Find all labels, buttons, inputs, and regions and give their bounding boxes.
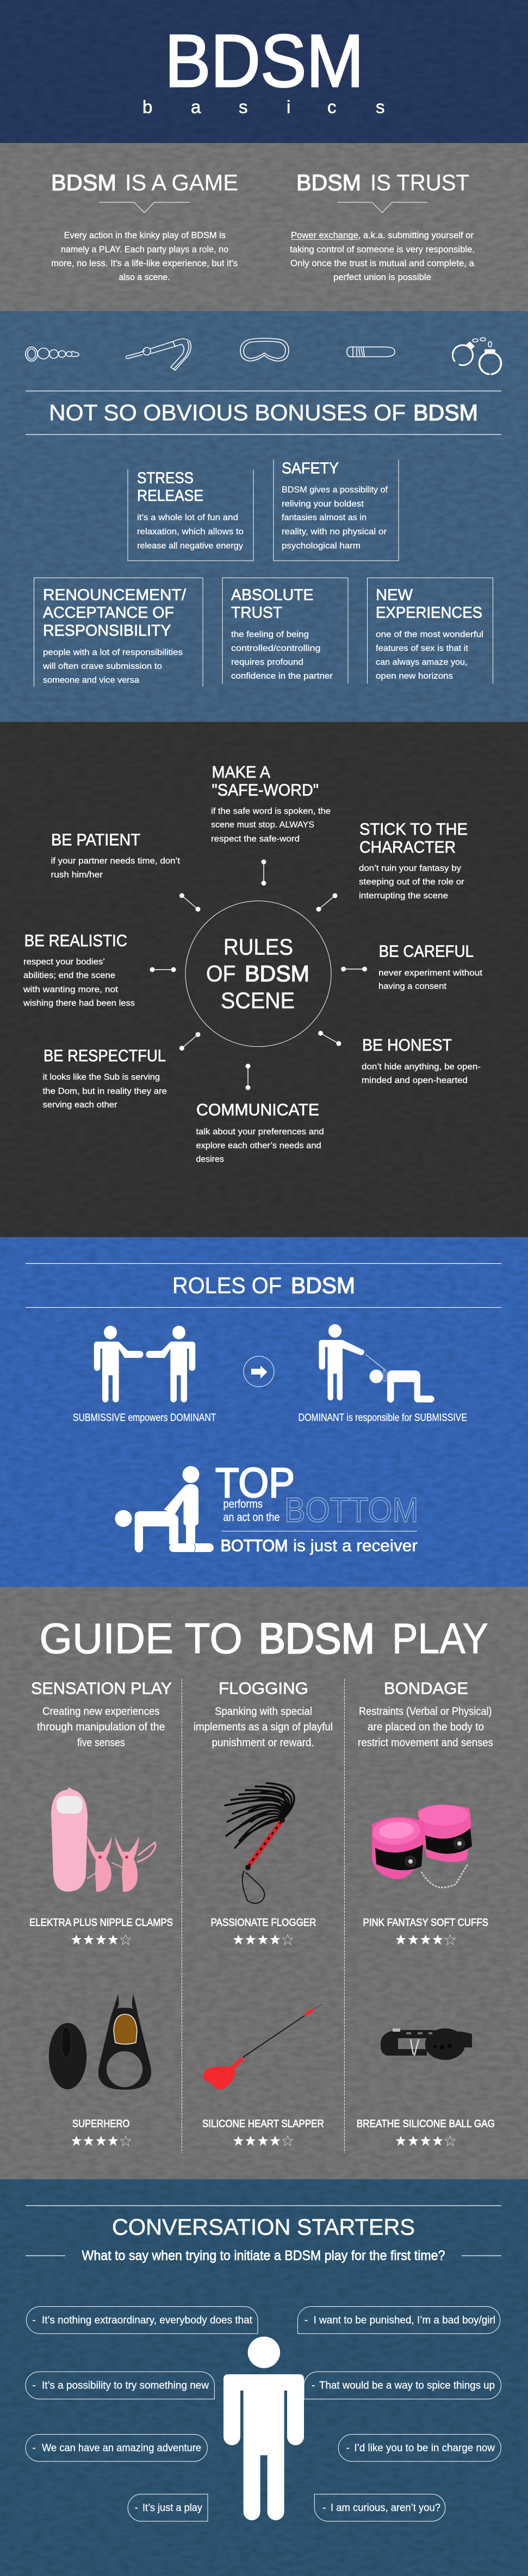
rule: make a safe-word: "SAFE-WORD" xyxy=(212,780,319,799)
bubble: spice things up: - xyxy=(312,2380,315,2391)
heading: roles of BDSM: ROLES OF xyxy=(172,1273,282,1298)
card: stress release xyxy=(128,469,253,561)
card: renouncement: RENOUNCEMENT/ xyxy=(43,586,187,604)
rule: communicate xyxy=(196,1100,324,1164)
product: superhero xyxy=(49,1994,151,2090)
heading: guide to BDSM play: PLAY xyxy=(392,1614,488,1662)
heading: roles of BDSM xyxy=(172,1273,355,1298)
card: renouncement: someone and vice versa xyxy=(43,675,139,685)
rule: communicate: desires xyxy=(196,1155,224,1164)
text: top performs an act on the bottom xyxy=(215,1460,419,1555)
icon: arrow in circle xyxy=(244,1356,274,1387)
rule: be respectful: it looks like the Sub is serving xyxy=(43,1073,160,1082)
bubble: curious: - xyxy=(322,2503,326,2513)
card: safety: fantasies almost as in xyxy=(282,513,367,522)
column text: bondage: Restraints (Verbal or Physical) xyxy=(359,1705,492,1717)
card: stress release: it’s a whole lot of fun and xyxy=(137,513,238,522)
panel: game and trust xyxy=(51,170,475,282)
center circle with title xyxy=(185,901,331,1047)
rule: stick to the character: steeping out of the role or xyxy=(359,878,464,887)
label: breathe silicone ball gag: BREATHE SILICONE BALL GAG xyxy=(357,2119,495,2130)
heading: BDSM is a game: IS A GAME xyxy=(125,170,238,195)
card: new experiences: open new horizons xyxy=(376,672,453,681)
text: game description: namely a PLAY. Each party plays a role, no xyxy=(61,244,228,255)
rule: be honest: BE HONEST xyxy=(362,1035,452,1054)
text: game description: Every action in the kinky play of BDSM is xyxy=(64,230,226,240)
text: trust description: taking control of someone is very responsible. xyxy=(290,244,475,255)
icon: handcuffs xyxy=(452,338,501,374)
column text: bondage: are placed on the body to xyxy=(368,1721,484,1733)
text: top performs an act on the bottom: TOP xyxy=(215,1460,295,1506)
label: silicone heart slapper: SILICONE HEART SLAPPER xyxy=(202,2119,324,2130)
rule: make a safe-word: if the safe word is spoken, the xyxy=(211,807,331,816)
panel: conversation starters xyxy=(26,2206,501,2521)
heading: BDSM is trust: BDSM xyxy=(296,170,361,195)
rule: be patient: if your partner needs time, don’t xyxy=(51,856,181,866)
icon: top and bottom figures xyxy=(115,1466,214,1553)
product: elektra plus nipple clamps xyxy=(51,1787,156,1892)
text: trust description: Only once the trust is mutual and complete, a xyxy=(290,258,475,269)
product: silicone heart slapper xyxy=(203,2004,322,2089)
column text: sensation play: SENSATION PLAY xyxy=(31,1679,172,1698)
heading: guide to BDSM play xyxy=(39,1614,488,1662)
text: trust description xyxy=(290,230,475,282)
rule: stick to the character: don’t ruin your fantasy by xyxy=(359,864,461,873)
column text: flogging: implements as a sign of playful xyxy=(194,1721,333,1733)
heading: not so obvious bonuses: NOT SO OBVIOUS BONUSES OF xyxy=(49,400,406,425)
text: top performs an act on the bottom: BOTTOM xyxy=(221,1536,288,1555)
product: pink fantasy soft cuffs xyxy=(371,1805,472,1888)
card: renouncement: will often crave submission to xyxy=(42,662,162,671)
label: passionate flogger: PASSIONATE FLOGGER xyxy=(211,1917,316,1929)
column text: flogging: FLOGGING xyxy=(219,1679,308,1698)
text: top performs an act on the bottom: performs xyxy=(223,1498,263,1511)
rating stars row 2 xyxy=(71,2136,456,2146)
card: new experiences: features of sex is that it xyxy=(376,644,469,653)
center circle with title: OF xyxy=(206,961,236,986)
card: safety: SAFETY xyxy=(282,460,339,477)
label: elektra plus nipple clamps: ELEKTRA PLUS NIPPLE CLAMPS xyxy=(29,1917,173,1929)
panel: bonuses of BDSM xyxy=(26,338,501,687)
card: absolute trust xyxy=(222,578,348,684)
product: breathe silicone ball gag xyxy=(381,2028,472,2060)
text: trust description: perfect union is possible xyxy=(333,272,431,282)
rule: stick to the character: STICK TO THE xyxy=(359,820,468,839)
card: absolute trust: ABSOLUTE xyxy=(231,586,313,604)
rule: be patient: BE PATIENT xyxy=(51,830,140,849)
rule: be patient: rush him/her xyxy=(51,870,103,879)
rule: make a safe-word: respect the safe-word xyxy=(211,834,300,843)
rule: be respectful: serving each other xyxy=(43,1101,117,1110)
bubble: want to be punished xyxy=(297,2307,500,2333)
rule: communicate: COMMUNICATE xyxy=(196,1100,319,1119)
rule: be respectful: BE RESPECTFUL xyxy=(44,1046,166,1065)
card: safety: psychological harm xyxy=(282,541,361,550)
text: top performs an act on the bottom: BOTTOM xyxy=(284,1491,419,1530)
column text: bondage: BONDAGE xyxy=(384,1679,468,1698)
rating stars row 1 xyxy=(71,1935,456,1945)
text: trust description: Power exchange, a.k.a. submitting yourself or xyxy=(291,230,474,240)
caption: submissive empowers dominant: SUBMISSIVE empowers DOMINANT xyxy=(73,1412,216,1424)
center circle with title: BDSM xyxy=(245,961,309,986)
card: stress release: STRESS xyxy=(137,470,194,487)
icon: two figures handing over xyxy=(94,1326,195,1402)
bubble: possibility to try something new: It’s a possibility to try something new xyxy=(42,2380,209,2391)
card: stress release: RELEASE xyxy=(137,487,203,505)
card: new experiences: NEW xyxy=(376,586,413,604)
rule: be honest: don’t hide anything, be open- xyxy=(362,1063,481,1071)
bubble: possibility to try something new: - xyxy=(32,2380,36,2391)
subheading: what to say: What to say when trying to initiate a BDSM play for the first time? xyxy=(82,2248,445,2263)
rule: stick to the character: interrupting the scene xyxy=(359,891,448,901)
rule: be careful: never experiment without xyxy=(378,969,483,978)
icon: flogger xyxy=(126,339,191,370)
bubble: amazing adventure: - xyxy=(32,2443,36,2454)
text: game description: more, no less. It's a life-like experience, but it's xyxy=(51,258,238,269)
heading: roles of BDSM: BDSM xyxy=(291,1273,355,1298)
card: new experiences: one of the most wonderful xyxy=(376,630,483,639)
bubble: amazing adventure: We can have an amazing adventure xyxy=(42,2443,201,2454)
icon: blindfold mask xyxy=(240,338,289,361)
column text: bondage: restrict movement and senses xyxy=(358,1737,493,1749)
card: absolute trust: requires profound xyxy=(231,657,303,667)
rule: be realistic: abilities; end the scene xyxy=(23,971,115,980)
card: safety: reliving your boldest xyxy=(282,499,364,508)
center circle with title: SCENE xyxy=(221,988,295,1013)
caption: dominant is responsible: DOMINANT is responsible for SUBMISSIVE xyxy=(299,1412,467,1424)
rule: be honest xyxy=(362,1035,481,1085)
card: absolute trust: controlled/controlling xyxy=(231,644,321,653)
card: safety xyxy=(274,460,399,561)
icon: standing figure xyxy=(223,2337,304,2520)
panel: rules of BDSM scene xyxy=(23,762,483,1164)
rule: stick to the character: CHARACTER xyxy=(359,837,456,856)
bubble: in charge now: - xyxy=(346,2443,350,2454)
card: renouncement xyxy=(34,578,203,687)
bubble: want to be punished: - xyxy=(305,2314,308,2326)
column text: sensation play xyxy=(31,1679,172,1749)
rule: be realistic: respect your bodies’ xyxy=(23,957,105,967)
label: superhero: SUPERHERO xyxy=(72,2119,129,2130)
bubble: nothing extraordinary: It’s nothing extraordinary, everybody does that xyxy=(42,2314,253,2326)
column text: sensation play: five senses xyxy=(77,1737,125,1749)
subtitle: basics: basics xyxy=(142,97,385,117)
text: game description: also a scene. xyxy=(119,272,170,282)
rule: be careful: BE CAREFUL xyxy=(379,942,474,961)
rule: be patient xyxy=(51,830,181,879)
panel: guide to BDSM play xyxy=(29,1614,495,2153)
bubble: just a play: - xyxy=(135,2503,138,2513)
bubble: just a play: It’s just a play xyxy=(142,2503,202,2513)
product: passionate flogger xyxy=(225,1783,294,1903)
card: new experiences: can always amaze you, xyxy=(376,657,468,667)
bubble: just a play xyxy=(128,2494,208,2521)
heading: not so obvious bonuses: BDSM xyxy=(413,400,478,425)
rule: be careful xyxy=(378,942,483,991)
rule: communicate: explore each other’s needs and xyxy=(196,1141,321,1151)
icon: vibrator xyxy=(347,347,395,357)
heading: guide to BDSM play: BDSM xyxy=(259,1614,375,1662)
card: new experiences: EXPERIENCES xyxy=(376,604,482,622)
bubble: curious xyxy=(314,2494,445,2521)
card: stress release: relaxation, which allows to xyxy=(137,527,244,537)
card: absolute trust: confidence in the partner xyxy=(231,672,333,681)
text: top performs an act on the bottom: is just a receiver xyxy=(293,1536,418,1555)
rule: be respectful xyxy=(43,1046,167,1110)
title: BDSM: BDSM xyxy=(165,20,364,103)
rule: be realistic: BE REALISTIC xyxy=(24,931,127,950)
connector dots xyxy=(150,860,367,1090)
bubble: curious: I am curious, aren’t you? xyxy=(331,2503,440,2513)
center circle with title: RULES xyxy=(223,934,293,959)
rule: be realistic xyxy=(23,931,135,1008)
heading: BDSM is trust xyxy=(296,170,469,195)
panel: hero title xyxy=(142,20,385,117)
card: safety: reality, with no physical or xyxy=(282,527,387,537)
card: renouncement: ACCEPTANCE OF xyxy=(43,604,174,622)
rule: stick to the character xyxy=(359,820,468,901)
card: absolute trust: the feeling of being xyxy=(231,630,309,639)
card: safety: BDSM gives a possibility of xyxy=(282,486,388,495)
rule: be respectful: the Dom, but in reality they are xyxy=(43,1087,167,1096)
bubble: want to be punished: I want to be punished, I’m a bad boy/girl xyxy=(313,2314,495,2326)
column text: flogging: punishment or reward. xyxy=(212,1737,314,1749)
card: new experiences xyxy=(368,578,493,684)
card: stress release: release all negative energy xyxy=(137,541,243,550)
icon: anal beads xyxy=(26,347,79,361)
card: renouncement: RESPONSIBILITY xyxy=(43,622,171,640)
rule: be careful: having a consent xyxy=(378,982,447,991)
rule: be realistic: with wanting more, not xyxy=(23,985,119,994)
rule: be honest: minded and open-hearted xyxy=(362,1076,468,1085)
column text: bondage xyxy=(358,1679,493,1749)
text: top performs an act on the bottom: an act on the xyxy=(223,1511,279,1524)
rule: make a safe-word: MAKE A xyxy=(212,762,270,781)
bubble: spice things up: That would be a way to spice things up xyxy=(319,2380,495,2391)
heading: BDSM is a game xyxy=(51,170,238,195)
heading: BDSM is trust: IS TRUST xyxy=(370,170,469,195)
label: pink fantasy soft cuffs: PINK FANTASY SOFT CUFFS xyxy=(363,1917,488,1929)
text: game description xyxy=(51,230,238,282)
card: absolute trust: TRUST xyxy=(231,604,282,622)
heading: BDSM is a game: BDSM xyxy=(51,170,116,195)
rule: make a safe-word: scene must stop. ALWAYS xyxy=(211,821,314,830)
column text: sensation play: through manipulation of the xyxy=(37,1721,165,1733)
bubble: spice things up xyxy=(304,2372,501,2399)
column text: flogging xyxy=(194,1679,333,1749)
rule: be realistic: wishing there had been less xyxy=(23,999,135,1008)
column text: flogging: Spanking with special xyxy=(215,1705,312,1717)
column text: sensation play: Creating new experiences xyxy=(42,1705,160,1717)
heading: guide to BDSM play: GUIDE TO xyxy=(39,1614,243,1662)
bubble: in charge now: I’d like you to be in charge now xyxy=(354,2443,495,2454)
bubble: possibility to try something new xyxy=(26,2372,214,2399)
heading: conversation starters: CONVERSATION STARTERS xyxy=(112,2214,415,2239)
card: renouncement: people with a lot of responsibilities xyxy=(43,648,183,657)
bubble: nothing extraordinary: - xyxy=(32,2314,36,2326)
rule: communicate: talk about your preferences and xyxy=(196,1127,324,1137)
rule: make a safe-word xyxy=(211,762,331,843)
bubble: amazing adventure xyxy=(26,2434,207,2461)
panel: roles of BDSM xyxy=(26,1264,501,1555)
bubble: nothing extraordinary xyxy=(27,2307,258,2333)
bubble: in charge now xyxy=(338,2434,501,2461)
icon: dominant leading submissive xyxy=(319,1324,434,1402)
